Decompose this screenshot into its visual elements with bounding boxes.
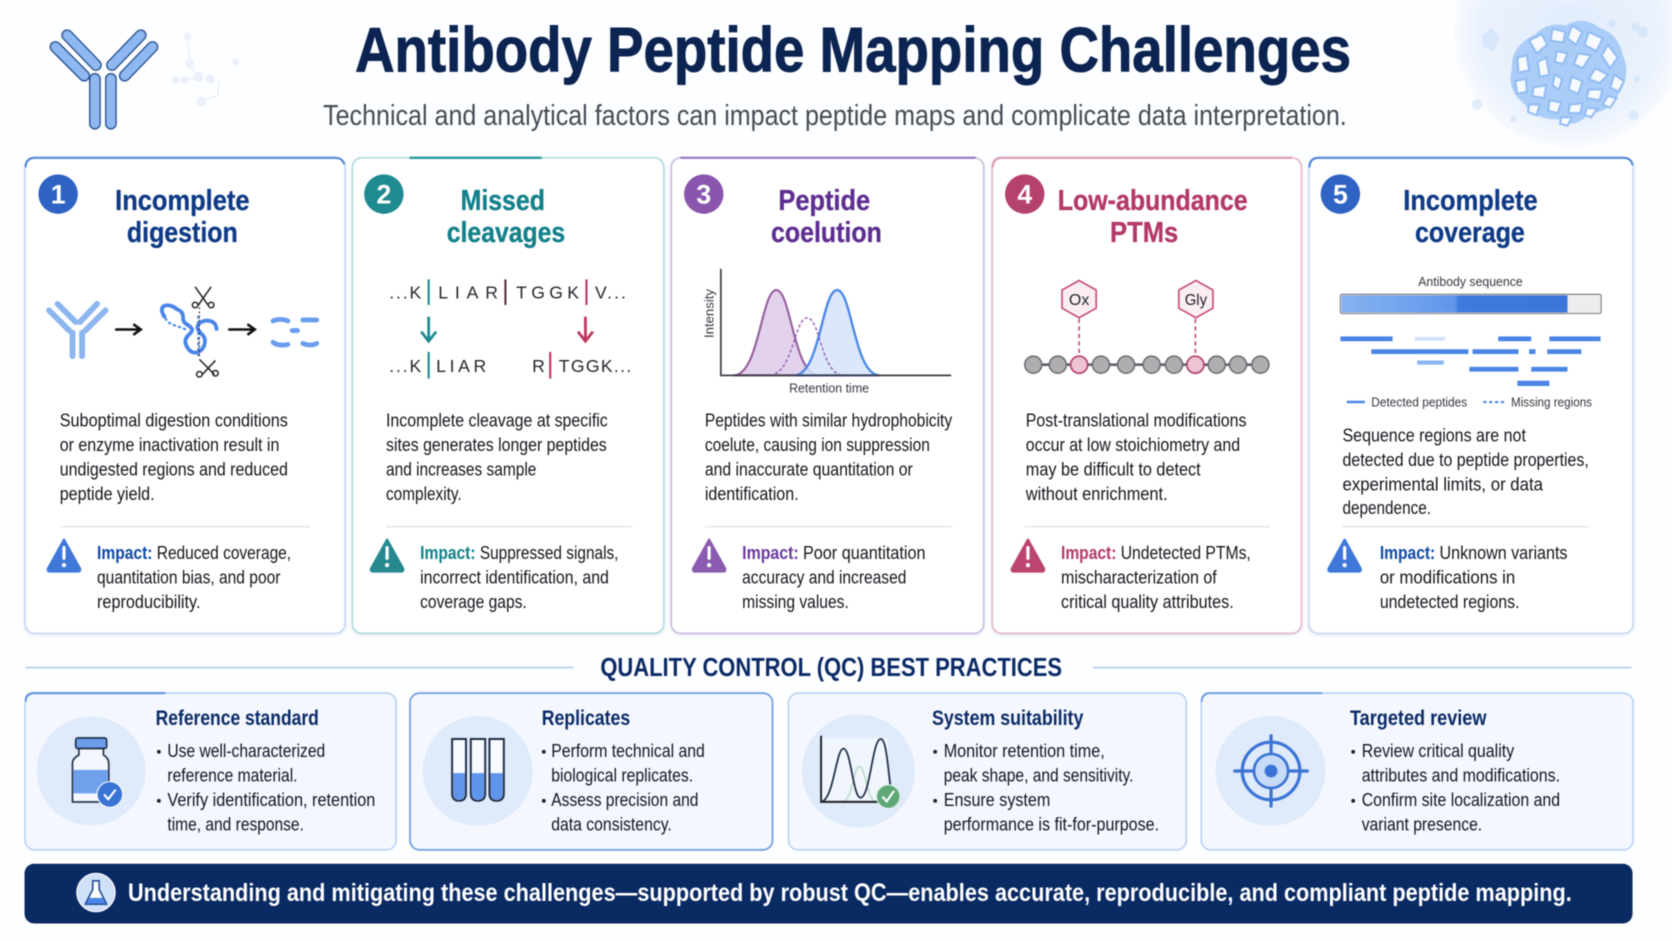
icon: test tubes — [452, 739, 504, 801]
heading: Peptide — [778, 185, 870, 217]
description: Sequence regions are not — [1343, 424, 1527, 445]
illustration: cleavage sequence: TGGK — [516, 283, 579, 303]
bullet list — [1351, 740, 1560, 835]
panel: incomplete coverage — [1309, 158, 1633, 633]
illustration: cleavage sequence: ...K — [389, 283, 421, 303]
bullet list: Monitor retention time, — [944, 740, 1105, 761]
chart: overlapping peaks: Intensity — [701, 289, 716, 338]
illustration: cleavage sequence: R — [532, 356, 545, 376]
description: Post-translational modifications — [1026, 410, 1247, 431]
heading — [447, 185, 565, 249]
panel: missed cleavages — [352, 158, 664, 633]
panel: peptide coelution — [671, 158, 984, 633]
impact text: coverage gaps. — [420, 591, 527, 612]
bullet list: variant presence. — [1362, 814, 1482, 835]
heading: Missed — [461, 185, 545, 217]
impact text: Reduced coverage, — [157, 542, 291, 563]
title: Antibody Peptide Mapping Challenges — [355, 15, 1351, 85]
heading: coelution — [771, 217, 882, 249]
impact text: quantitation bias, and poor — [97, 566, 280, 587]
bullet list: biological replicates. — [551, 765, 693, 786]
illustration: cleavage sequence — [389, 279, 631, 379]
heading — [1403, 185, 1538, 249]
icon: flask — [77, 873, 115, 912]
description: sites generates longer peptides — [386, 434, 607, 455]
bullet list — [542, 740, 705, 835]
card heading: Targeted review — [1350, 707, 1487, 730]
panel: incomplete digestion — [25, 158, 345, 633]
bullet list — [157, 740, 375, 835]
impact text — [97, 542, 291, 612]
description: and inaccurate quantitation or — [705, 459, 913, 480]
heading: Incomplete — [1403, 185, 1538, 217]
legend — [1347, 394, 1592, 409]
PTM tag: Ox: Ox — [1069, 292, 1089, 309]
icon: warning — [48, 540, 80, 572]
bullet list — [933, 740, 1159, 835]
card heading: Reference standard — [156, 707, 319, 730]
description: identification. — [705, 483, 799, 504]
bullet list: Perform technical and — [551, 740, 705, 761]
subtitle: Technical and analytical factors can impact peptide maps and complicate data interpretation. — [323, 100, 1347, 132]
description: Suboptimal digestion conditions — [60, 410, 288, 431]
heading: PTMs — [1110, 217, 1178, 249]
heading — [1058, 185, 1248, 249]
legend: Missing regions — [1511, 394, 1592, 409]
icon: scissors bottom — [197, 359, 218, 377]
bullet list: Verify identification, retention — [167, 789, 375, 810]
impact text — [742, 542, 926, 612]
bullet list: data consistency. — [551, 814, 672, 835]
panel: targeted review — [1201, 693, 1633, 850]
number badge 5 — [1321, 174, 1360, 214]
number badge 3 — [684, 174, 724, 214]
icon: warning — [1012, 540, 1044, 572]
arrow: red down — [578, 317, 593, 341]
description: experimental limits, or data — [1343, 474, 1544, 495]
description: occur at low stoichiometry and — [1026, 434, 1240, 455]
number badge 1 — [38, 174, 78, 214]
chart: sequence coverage — [1340, 274, 1601, 409]
number badge 3: 3 — [696, 180, 711, 210]
description: detected due to peptide properties, — [1343, 449, 1589, 470]
bullet list: reference material. — [167, 765, 298, 786]
description: without enrichment. — [1025, 483, 1168, 504]
panel: reference standard — [25, 693, 396, 850]
heading: Low-abundance — [1058, 185, 1248, 217]
impact text: Impact: — [1380, 542, 1435, 563]
PTM tag: Gly: Gly — [1185, 292, 1207, 309]
description: coelute, causing ion suppression — [705, 434, 930, 455]
panel: system suitability — [789, 693, 1186, 850]
impact text: Unknown variants — [1440, 542, 1568, 563]
number badge 2 — [364, 174, 404, 214]
impact text — [1061, 542, 1251, 612]
impact text: Impact: — [420, 542, 476, 563]
number badge 2: 2 — [376, 180, 391, 210]
illustration: cleavage sequence: LIAR — [436, 356, 486, 376]
description: or enzyme inactivation result in — [60, 434, 279, 455]
description — [705, 410, 953, 504]
description: complexity. — [386, 483, 462, 504]
bullet list: Review critical quality — [1362, 740, 1515, 761]
heading: Incomplete — [115, 185, 250, 217]
description: and increases sample — [386, 459, 536, 480]
heading: digestion — [127, 217, 238, 249]
impact text: missing values. — [742, 591, 849, 612]
PTM tag: Gly — [1179, 280, 1213, 318]
bullet list: peak shape, and sensitivity. — [944, 765, 1134, 786]
legend: Detected peptides — [1371, 394, 1468, 409]
description — [60, 410, 288, 504]
icon: vial with check — [73, 738, 123, 807]
bullet list: attributes and modifications. — [1362, 765, 1560, 786]
description: may be difficult to detect — [1026, 459, 1201, 480]
decorative molecule: faint left — [173, 33, 238, 106]
heading: cleavages — [447, 217, 565, 249]
bullet list: performance is fit-for-purpose. — [944, 814, 1159, 835]
icon: warning — [693, 540, 725, 572]
description: dependence. — [1343, 497, 1431, 518]
chart: overlapping peaks — [701, 269, 951, 395]
impact text: critical quality attributes. — [1061, 591, 1234, 612]
number badge 1: 1 — [51, 180, 66, 210]
impact text: mischaracterization of — [1061, 566, 1217, 587]
bullet list: Use well-characterized — [167, 740, 325, 761]
description — [1025, 410, 1247, 504]
impact text: incorrect identification, and — [420, 566, 609, 587]
illustration: cleavage sequence: V... — [595, 283, 626, 303]
impact text: accuracy and increased — [742, 566, 906, 587]
chart: overlapping peaks: Retention time — [789, 380, 869, 395]
card heading: System suitability — [932, 707, 1084, 730]
card heading: Replicates — [542, 707, 630, 730]
number badge 4 — [1005, 174, 1044, 214]
impact text: Poor quantitation — [803, 542, 926, 563]
impact text: reproducibility. — [97, 591, 200, 612]
PTM tag: Ox — [1062, 280, 1096, 318]
bullet list: time, and response. — [167, 814, 304, 835]
description: Incomplete cleavage at specific — [386, 410, 608, 431]
illustration: antibody digested into fragments — [49, 287, 317, 377]
heading: coverage — [1415, 217, 1525, 249]
icon: antibody — [55, 35, 152, 124]
decorative molecule: top right — [1454, 0, 1672, 147]
impact text: or modifications in — [1380, 566, 1515, 587]
illustration: peptide chain with modifications — [1025, 280, 1269, 373]
impact text: Suppressed signals, — [480, 542, 618, 563]
bullet list: Assess precision and — [551, 789, 698, 810]
illustration: cleavage sequence: LIAR — [438, 283, 498, 303]
icon: target — [1235, 736, 1307, 806]
icon: chromatogram with check — [821, 736, 900, 808]
description: undigested regions and reduced — [60, 459, 288, 480]
bullet list: Confirm site localization and — [1362, 789, 1560, 810]
icon: warning — [371, 540, 403, 572]
number badge 4: 4 — [1017, 180, 1032, 210]
panel: replicates — [410, 693, 773, 850]
illustration: cleavage sequence: TGGK... — [559, 356, 631, 376]
impact text — [1380, 542, 1568, 612]
description — [386, 410, 608, 504]
panel: low-abundance PTMs — [992, 158, 1301, 633]
heading — [771, 185, 882, 249]
chart: sequence coverage: Antibody sequence — [1418, 274, 1523, 289]
impact text — [420, 542, 618, 612]
section heading: QC best practices: QUALITY CONTROL (QC) BEST PRACTICES — [600, 654, 1062, 682]
description — [1343, 424, 1589, 518]
bullet list: Ensure system — [944, 789, 1050, 810]
heading — [115, 185, 250, 249]
arrow: teal down — [421, 317, 436, 341]
impact text: Impact: — [1061, 542, 1116, 563]
description: Peptides with similar hydrophobicity — [705, 410, 953, 431]
impact text: undetected regions. — [1380, 591, 1520, 612]
number badge 5: 5 — [1333, 180, 1348, 210]
banner: conclusion — [25, 864, 1633, 923]
impact text: Undetected PTMs, — [1121, 542, 1251, 563]
illustration: cleavage sequence: ...K — [389, 356, 421, 376]
description: peptide yield. — [60, 483, 155, 504]
impact text: Impact: — [97, 542, 152, 563]
icon: warning — [1328, 540, 1361, 572]
icon: scissors top — [192, 287, 214, 308]
impact text: Impact: — [742, 542, 799, 563]
